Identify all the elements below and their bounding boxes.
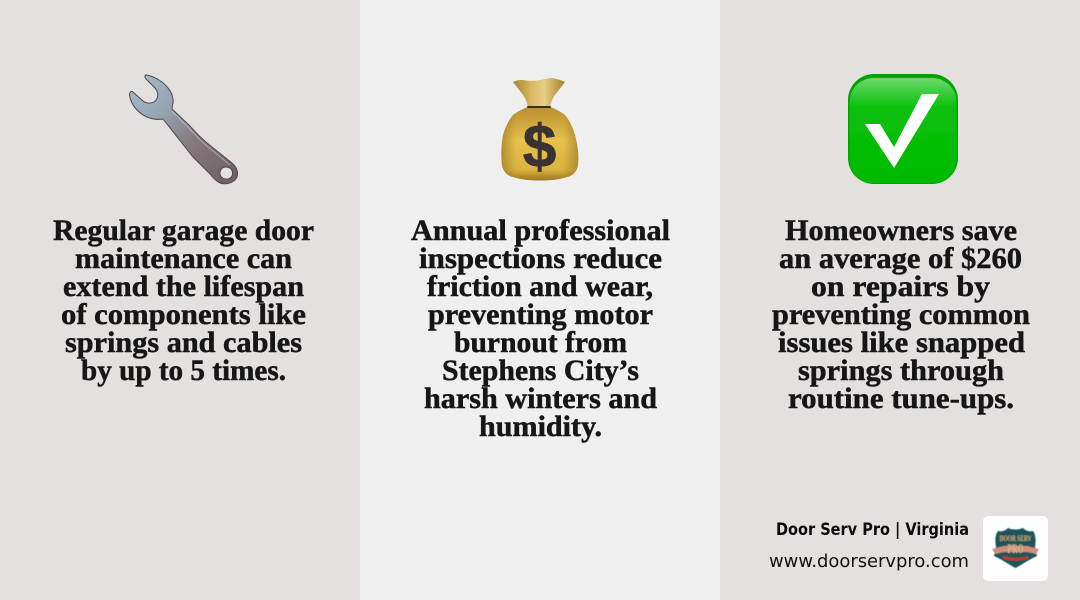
text: professional inspections: inspections reduce	[419, 242, 662, 275]
company name: Door Serv Pro | Virginia	[776, 520, 969, 540]
logo: Door Serv Pro: DOOR SERV	[1000, 534, 1032, 543]
text: professional inspections: humidity.	[479, 410, 602, 443]
panel: component lifespan	[0, 0, 360, 600]
text: professional inspections: harsh winters and	[424, 382, 657, 415]
text: component lifespan: maintenance can	[75, 242, 292, 275]
icon: wrench	[130, 75, 238, 184]
website: www.doorservpro.com	[769, 551, 969, 572]
text: repair savings: an average of $260	[779, 242, 1022, 275]
text: component lifespan: Regular garage door	[53, 214, 314, 247]
text: repair savings: preventing common	[772, 298, 1030, 331]
text: repair savings: on repairs by	[811, 270, 990, 303]
text: professional inspections: friction and wear,	[427, 270, 653, 303]
logo: Door Serv Pro: PRO	[1008, 541, 1024, 556]
text: repair savings: routine tune-ups.	[788, 382, 1014, 415]
panel: professional inspections	[360, 0, 720, 600]
logo: Door Serv Pro	[983, 516, 1048, 581]
text: repair savings: Homeowners save	[785, 214, 1017, 247]
text: professional inspections: burnout from	[454, 326, 627, 359]
text: professional inspections	[411, 214, 670, 443]
icon: dollar sign: $	[523, 113, 556, 180]
panel: repair savings	[720, 0, 1080, 600]
text: professional inspections: preventing motor	[428, 298, 653, 331]
text: repair savings: issues like snapped	[778, 326, 1025, 359]
footer: company branding	[769, 516, 1048, 581]
text: component lifespan: springs and cables	[65, 326, 302, 359]
text: repair savings	[772, 214, 1030, 415]
text: professional inspections: Stephens City’s	[442, 354, 639, 387]
text: professional inspections: Annual professional	[411, 214, 670, 247]
text: component lifespan	[53, 214, 314, 387]
text: component lifespan: of components like	[61, 298, 306, 331]
text: component lifespan: by up to 5 times.	[81, 354, 286, 387]
text: repair savings: springs through	[798, 354, 1004, 387]
icon: green check mark	[848, 74, 958, 184]
icon: money bag	[501, 78, 578, 180]
text: component lifespan: extend the lifespan	[63, 270, 304, 303]
